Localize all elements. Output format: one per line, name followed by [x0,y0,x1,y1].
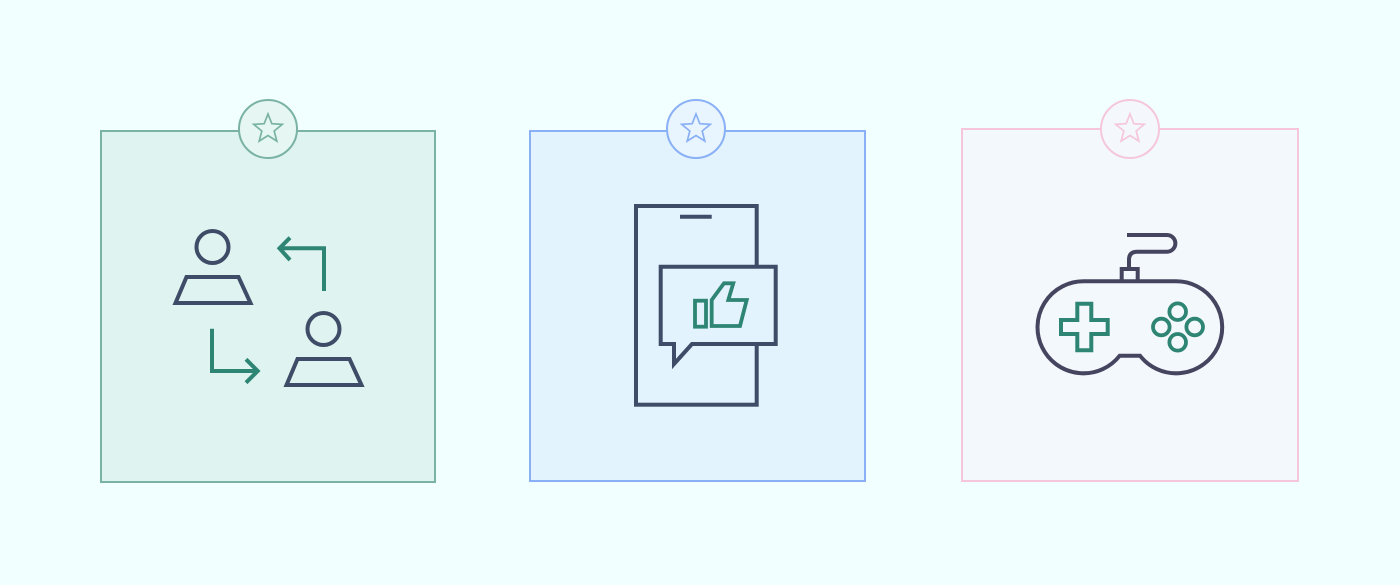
arrow: down and right [212,329,258,383]
arrow: up and left [280,238,324,291]
badge: pink star [1101,100,1159,158]
icon: controller body and cable [1038,235,1222,373]
icon: person top left [176,231,250,303]
panel: game controller [962,100,1298,481]
icon: speech bubble [661,267,776,364]
icon: thumbs up [695,283,747,327]
panel frame green [101,131,435,482]
icon: smartphone [636,206,757,405]
icon: action buttons [1153,303,1203,351]
icon: directional pad [1061,304,1108,350]
icon: person bottom right [286,313,362,385]
panel frame pink [962,129,1298,481]
badge: green star [239,100,297,158]
panel: people exchange [101,100,435,482]
badge: blue star [667,100,725,158]
panel: phone with thumbs up [530,100,865,481]
panel frame blue [530,131,865,481]
